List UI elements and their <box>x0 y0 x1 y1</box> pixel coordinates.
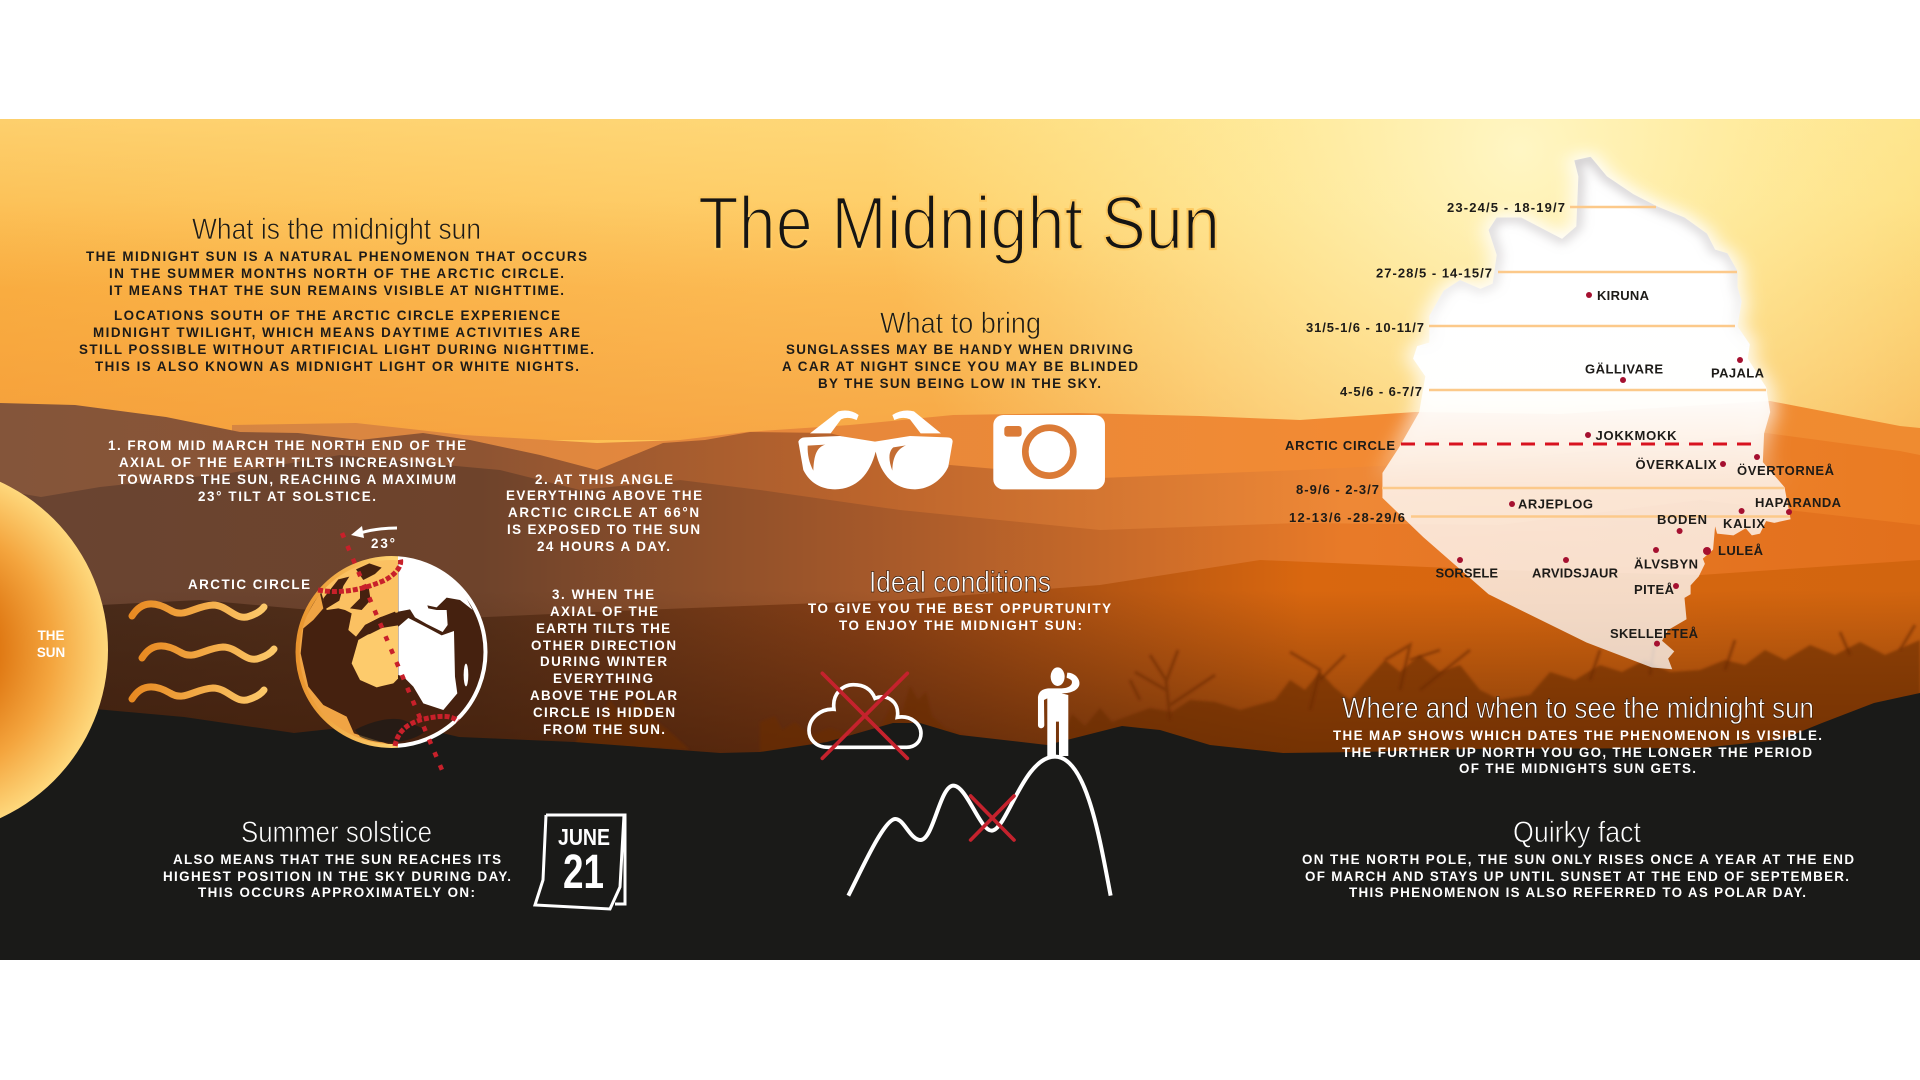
text block <box>163 852 511 900</box>
text block: OF MARCH AND STAYS UP UNTIL SUNSET AT THE END OF SEPTEMBER. <box>1305 869 1849 884</box>
panel: quirky fact <box>1302 816 1854 900</box>
text block: THE FURTHER UP NORTH YOU GO, THE LONGER THE PERIOD <box>1342 745 1812 760</box>
tilt axis <box>342 533 442 770</box>
heading: Summer solstice <box>241 816 432 849</box>
label: arctic circle: ARCTIC CIRCLE <box>188 577 310 592</box>
city labels: SKELLEFTEÅ <box>1610 626 1699 641</box>
icon: camera <box>993 415 1105 489</box>
text block: ALSO MEANS THAT THE SUN REACHES ITS <box>173 852 501 867</box>
antarctic circle dotted arc <box>395 716 458 746</box>
text block: TO ENJOY THE MIDNIGHT SUN: <box>839 618 1082 633</box>
text block: step 3: FROM THE SUN. <box>543 722 665 737</box>
heading: Where and when to see the midnight sun <box>1342 692 1814 725</box>
city labels: SORSELE <box>1436 566 1498 580</box>
heading: Quirky fact <box>1513 816 1642 849</box>
city labels: BODEN <box>1657 512 1707 527</box>
ground <box>0 693 1920 960</box>
text block: OF THE MIDNIGHTS SUN GETS. <box>1459 761 1696 776</box>
icon: sun rays waves <box>132 604 274 700</box>
icon: earth globe with tilt <box>296 526 486 770</box>
text block <box>808 601 1111 633</box>
panel: what to bring <box>782 307 1138 391</box>
text block: step 3: CIRCLE IS HIDDEN <box>533 705 675 720</box>
text block: step 2: 24 HOURS A DAY. <box>537 539 670 554</box>
text block: definition: IN THE SUMMER MONTHS NORTH OF THE ARCTIC CIRCLE. <box>109 266 564 281</box>
text block: THIS PHENOMENON IS ALSO REFERRED TO AS POLAR DAY. <box>1349 885 1806 900</box>
text block: THIS OCCURS APPROXIMATELY ON: <box>198 885 475 900</box>
text block <box>1302 852 1854 900</box>
city labels: KALIX <box>1723 516 1765 531</box>
sun label: THE <box>38 628 64 643</box>
text block: TO GIVE YOU THE BEST OPPURTUNITY <box>808 601 1111 616</box>
ground overlap on globe <box>355 719 427 742</box>
text block: definition: STILL POSSIBLE WITHOUT ARTIFICIAL LIGHT DURING NIGHTTIME. <box>79 342 594 357</box>
panel: summer solstice <box>163 816 511 900</box>
city labels: JOKKMOKK <box>1596 428 1677 443</box>
continents left side <box>297 556 400 747</box>
text block: step 2: 2. AT THIS ANGLE <box>535 472 673 487</box>
ring left <box>296 556 398 748</box>
text block: step 3: 3. WHEN THE <box>552 587 654 602</box>
text block: step 3: OTHER DIRECTION <box>531 638 676 653</box>
date labels: 12-13/6 -28-29/6 <box>1289 510 1405 525</box>
text block: step 3 <box>530 587 677 737</box>
infographic canvas <box>0 119 1920 960</box>
text block: step 1: 1. FROM MID MARCH THE NORTH END OF THE <box>108 438 466 453</box>
city labels: ÄLVSBYN <box>1634 557 1698 572</box>
text block: step 1: AXIAL OF THE EARTH TILTS INCREASINGLY <box>119 455 455 470</box>
city labels: ARJEPLOG <box>1518 497 1593 512</box>
text block: THE MAP SHOWS WHICH DATES THE PHENOMENON IS VISIBLE. <box>1333 728 1822 743</box>
date labels <box>1285 200 1565 525</box>
date labels: 27-28/5 - 14-15/7 <box>1376 266 1492 280</box>
panel: ideal conditions <box>808 566 1111 633</box>
bushes silhouette <box>576 640 1920 753</box>
text block: step 3: EARTH TILTS THE <box>536 621 670 636</box>
mountain line <box>848 757 1111 896</box>
title: The Midnight Sun <box>698 181 1220 265</box>
heading: What to bring <box>880 307 1041 340</box>
person <box>1038 667 1079 756</box>
red cross in valley <box>971 796 1014 840</box>
text block: ON THE NORTH POLE, THE SUN ONLY RISES ONCE A YEAR AT THE END <box>1302 852 1854 867</box>
text block: A CAR AT NIGHT SINCE YOU MAY BE BLINDED <box>782 359 1138 374</box>
arctic circle dotted arc <box>318 558 401 592</box>
text block: definition: LOCATIONS SOUTH OF THE ARCTIC CIRCLE EXPERIENCE <box>114 308 560 323</box>
city labels <box>1436 288 1842 641</box>
text block: step 2 <box>506 472 702 554</box>
background scene: sunset sky and hills <box>0 119 1920 960</box>
date labels: 23-24/5 - 18-19/7 <box>1447 200 1565 215</box>
text block: definition: IT MEANS THAT THE SUN REMAINS VISIBLE AT NIGHTTIME. <box>109 283 564 298</box>
city labels: ÖVERTORNEÅ <box>1737 463 1835 478</box>
map shape <box>1382 157 1791 669</box>
bush branches <box>1130 625 1915 720</box>
sun: SUN <box>37 645 65 660</box>
city dots <box>1457 292 1792 647</box>
calendar day: 21 <box>563 846 604 899</box>
text block: step 1 <box>108 438 466 504</box>
text block <box>1333 728 1822 776</box>
continents right side <box>398 556 473 710</box>
text block <box>782 342 1138 391</box>
panel: where and when <box>1333 692 1822 776</box>
city labels: PITEÅ <box>1634 582 1675 597</box>
text block: step 3: DURING WINTER <box>540 654 667 669</box>
text block: step 1: 23° TILT AT SOLSTICE. <box>198 489 376 504</box>
date labels: 31/5-1/6 - 10-11/7 <box>1306 320 1424 335</box>
map glow <box>1382 157 1791 669</box>
text block: step 3: AXIAL OF THE <box>550 604 658 619</box>
ring right <box>398 556 488 748</box>
icon: sunglasses <box>798 411 953 489</box>
tilt arrow <box>360 528 397 533</box>
text block: HIGHEST POSITION IN THE SKY DURING DAY. <box>163 869 511 884</box>
heading: Ideal conditions <box>869 566 1051 599</box>
city labels: KIRUNA <box>1597 288 1650 303</box>
text block: step 3: EVERYTHING <box>553 671 653 686</box>
text block: definition: THIS IS ALSO KNOWN AS MIDNIGHT LIGHT OR WHITE NIGHTS. <box>95 359 579 374</box>
date lines <box>1382 207 1790 516</box>
text block: BY THE SUN BEING LOW IN THE SKY. <box>818 376 1101 391</box>
icon: crossed out cloud <box>809 673 921 758</box>
tilt label: 23° <box>371 536 395 551</box>
date labels: 4-5/6 - 6-7/7 <box>1340 384 1422 399</box>
city labels: GÄLLIVARE <box>1585 362 1663 376</box>
text block: SUNGLASSES MAY BE HANDY WHEN DRIVING <box>786 342 1133 357</box>
text block: definition: THE MIDNIGHT SUN IS A NATURAL PHENOMENON THAT OCCURS <box>86 249 587 264</box>
heading: What is the midnight sun <box>192 213 481 246</box>
calendar month: JUNE <box>558 824 610 850</box>
city labels: LULEÅ <box>1718 543 1764 558</box>
panel: map of northern sweden <box>1285 157 1842 669</box>
text block: definition <box>79 249 594 374</box>
city labels: ARVIDSJAUR <box>1532 566 1619 580</box>
arctic circle dashed line <box>1401 442 1759 446</box>
text block: step 1: TOWARDS THE SUN, REACHING A MAXIMUM <box>118 472 456 487</box>
date labels: ARCTIC CIRCLE <box>1285 438 1395 453</box>
city labels: PAJALA <box>1711 366 1765 380</box>
icon: person on mountain <box>848 667 1111 896</box>
panel: what is the midnight sun <box>79 213 594 374</box>
text block: step 2: ARCTIC CIRCLE AT 66°N <box>508 505 699 520</box>
city labels: ÖVERKALIX <box>1636 457 1717 472</box>
city labels: HAPARANDA <box>1755 495 1842 510</box>
sun <box>0 465 108 835</box>
icon: calendar june 21 <box>535 815 625 909</box>
text block: step 2: EVERYTHING ABOVE THE <box>506 488 702 503</box>
date labels: 8-9/6 - 2-3/7 <box>1296 482 1379 497</box>
text block: step 2: IS EXPOSED TO THE SUN <box>507 522 700 537</box>
text block: definition: MIDNIGHT TWILIGHT, WHICH MEANS DAYTIME ACTIVITIES ARE <box>93 325 580 340</box>
text block: step 3: ABOVE THE POLAR <box>530 688 677 703</box>
